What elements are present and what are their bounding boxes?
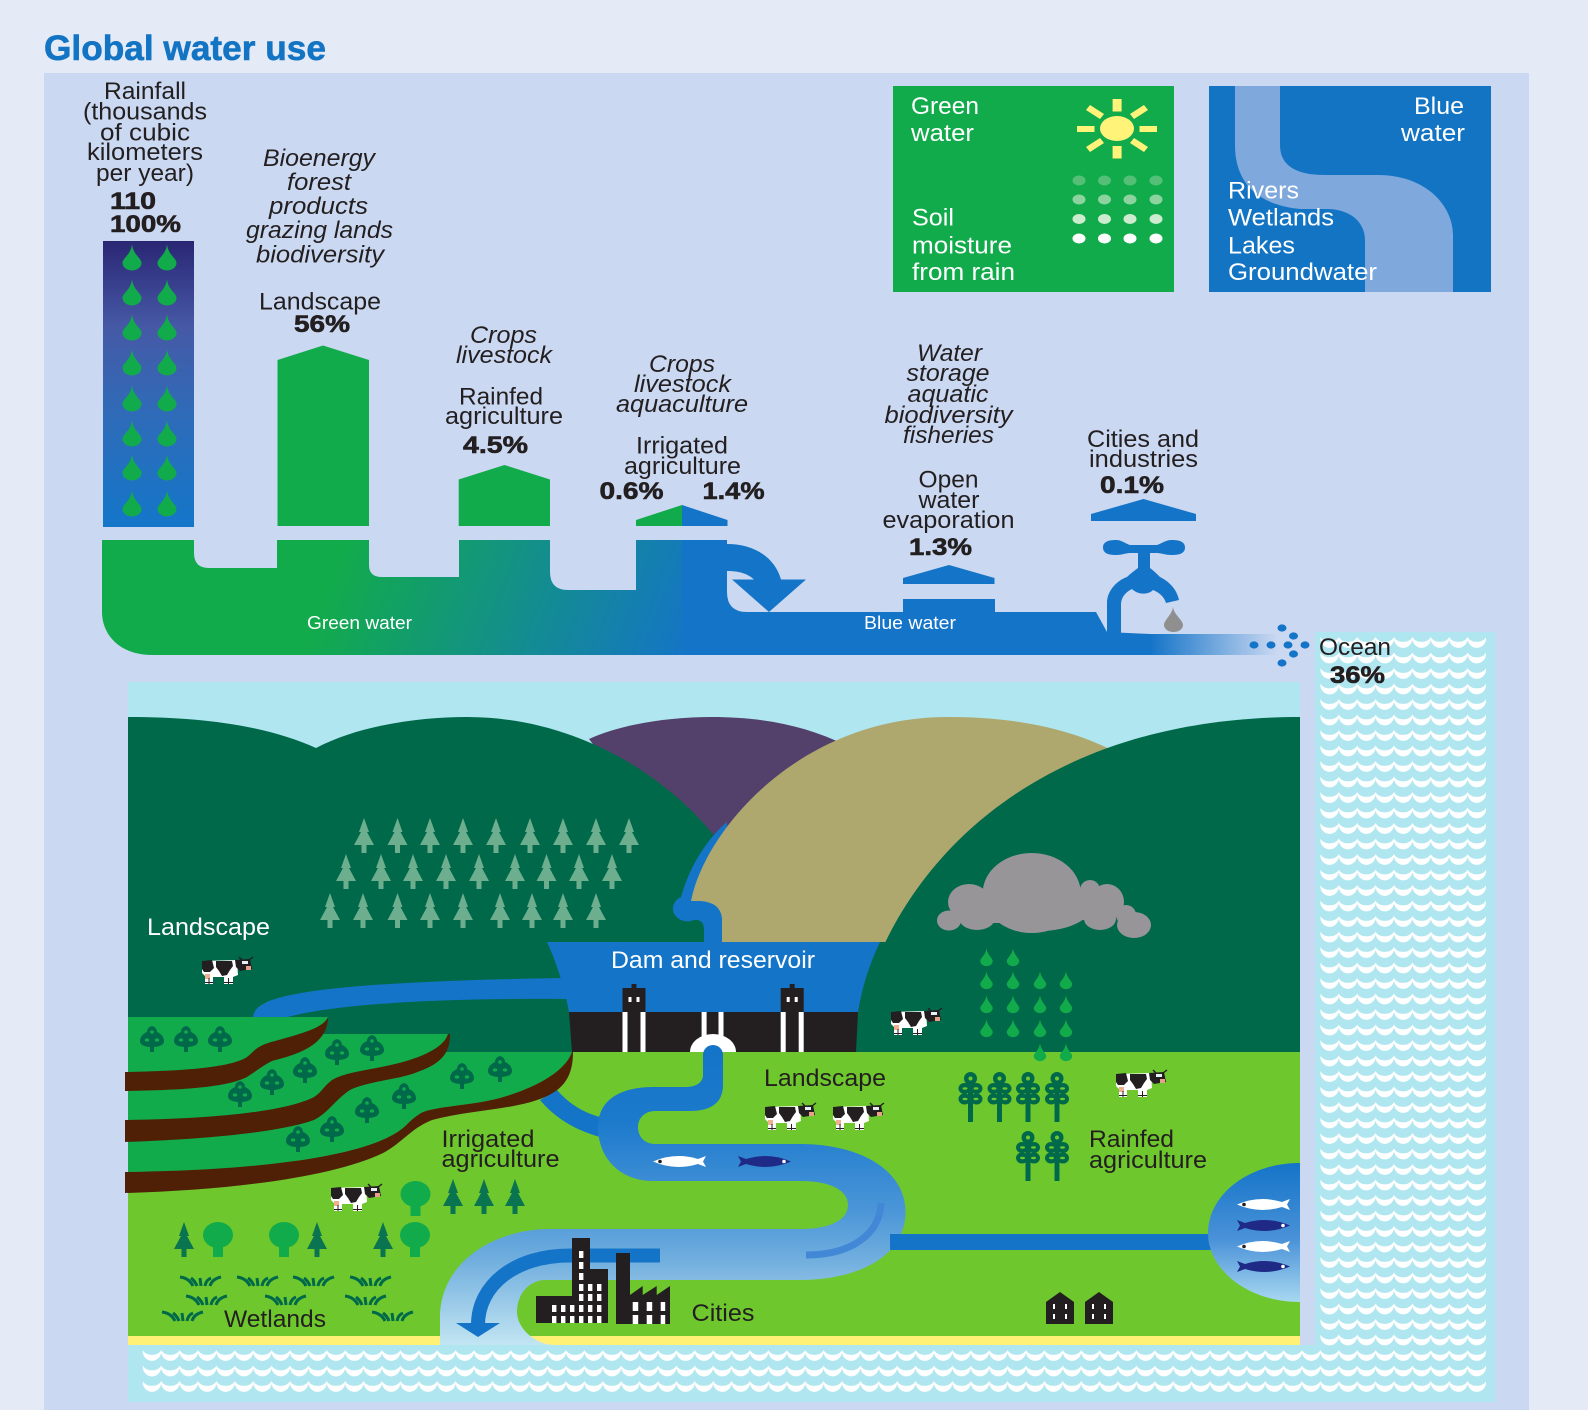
label: rainfed agriculture [445, 322, 563, 459]
terraces [125, 1017, 573, 1193]
label: open water evaporation: Water [917, 340, 983, 367]
title: Global water use [44, 29, 326, 68]
terrace trees [140, 1026, 512, 1152]
label: landscape uses: forest [287, 169, 352, 196]
label: open water evaporation [882, 340, 1014, 561]
label: landscape uses: grazing lands [246, 217, 393, 244]
label: landscape uses: Bioenergy [263, 145, 377, 172]
label: rainfall: 100% [110, 211, 181, 238]
mountain stream [673, 822, 730, 945]
label: cities: Cities [692, 1300, 754, 1327]
canal to terraces [253, 978, 568, 1017]
label: irrigated agriculture scene: Irrigated [442, 1126, 534, 1153]
purple distant hill [589, 717, 845, 900]
label: irrigated agriculture: agriculture [624, 453, 741, 480]
label: rainfall: Rainfall [104, 78, 186, 105]
panel: green water legend [893, 86, 1174, 292]
legend text: water bodies: Rivers [1228, 178, 1299, 204]
label: irrigated agriculture: Irrigated [636, 432, 728, 460]
flow: blue water [682, 540, 1277, 655]
label: irrigated agriculture: 0.6% [600, 478, 664, 505]
legend text: water bodies: Lakes [1228, 232, 1295, 260]
dam wall [569, 1012, 858, 1052]
label: open water evaporation: water [917, 487, 980, 514]
side channel [540, 1090, 600, 1137]
label: landscape uses: Landscape [259, 288, 381, 316]
label: cities and industries [1087, 426, 1199, 499]
label: rainfed agriculture scene: Rainfed [1089, 1126, 1174, 1153]
label: rainfed agriculture: 4.5% [463, 432, 528, 459]
label: landscape on hill: Landscape [147, 914, 270, 941]
arrow: river to sea [456, 1256, 660, 1337]
river fish [653, 1156, 791, 1167]
bar: rainfall with drops [103, 241, 194, 527]
label: green water: Green water [307, 613, 412, 633]
bar: rainfed agriculture [459, 465, 550, 526]
label: irrigated agriculture: Crops [649, 351, 715, 378]
small trees [174, 1179, 525, 1257]
label: irrigated agriculture scene [442, 1126, 560, 1173]
legend text: water bodies: Groundwater [1228, 259, 1377, 286]
label: rainfall: (thousands [83, 98, 207, 126]
label: cities and industries: Cities and [1087, 426, 1199, 453]
label: ocean [1319, 634, 1391, 689]
legend text: soil moisture: moisture [912, 232, 1012, 260]
reservoir [547, 942, 880, 1012]
label: open water evaporation: Open [918, 466, 978, 494]
landscape illustration [125, 682, 1300, 1345]
flow: green water [102, 540, 682, 655]
sky [128, 682, 1300, 1062]
label: landscape on plain: Landscape [764, 1065, 886, 1092]
rain drops [980, 948, 1072, 1061]
legend heading: green water [910, 93, 979, 147]
bar: landscape [278, 346, 369, 526]
icon: soil moisture dots [1072, 176, 1162, 244]
tan hill [691, 717, 1130, 945]
legend heading: blue water: water [1400, 120, 1465, 147]
ocean backing and wave pattern [128, 632, 1495, 1402]
ground [128, 1052, 1300, 1336]
icon: tap [1103, 540, 1185, 640]
label: cities and industries: industries [1089, 446, 1198, 473]
label: rainfall: of cubic [100, 120, 190, 146]
icon: river band [1235, 86, 1453, 292]
label: irrigated agriculture: 1.4% [702, 478, 764, 505]
icon: grey drip [1164, 607, 1183, 632]
label: ocean: 36% [1330, 662, 1385, 689]
dam tower right [781, 984, 804, 1012]
label: rainfed agriculture: livestock [456, 342, 554, 369]
label: rainfall: 110 [110, 188, 156, 215]
legend heading: green water: Green [911, 93, 979, 120]
legend heading: blue water: Blue [1414, 93, 1464, 120]
legend heading: green water: water [910, 120, 974, 147]
dark green hills [128, 717, 756, 1052]
label: rainfed agriculture: agriculture [445, 403, 563, 430]
label: ocean: Ocean [1319, 634, 1391, 661]
canal to lake [890, 1234, 1212, 1250]
label: open water evaporation: biodiversity [884, 402, 1014, 429]
panel: blue water legend [1209, 86, 1491, 292]
label: irrigated agriculture: livestock [634, 371, 733, 398]
legend text: water bodies [1228, 178, 1377, 286]
legend heading: blue water [1400, 93, 1465, 147]
icon: sun [1077, 99, 1157, 158]
label: irrigated agriculture: aquaculture [616, 391, 748, 418]
legend text: soil moisture: Soil [912, 204, 954, 232]
label: rainfall: kilometers [87, 139, 203, 166]
label: rainfed agriculture scene: agriculture [1089, 1147, 1207, 1174]
legend text: soil moisture [912, 204, 1015, 286]
hill backing behind dam [740, 942, 905, 1052]
legend text: soil moisture: from rain [912, 259, 1015, 286]
rain cloud [937, 853, 1151, 938]
label: rainfed agriculture: Rainfed [459, 384, 543, 410]
label: blue water: Blue water [864, 613, 956, 633]
bar: irrigated agriculture split green and blue [636, 505, 728, 526]
label: irrigated agriculture scene: agriculture [442, 1146, 560, 1173]
label: landscape uses: products [268, 193, 368, 220]
label: open water evaporation: fisheries [903, 422, 994, 449]
curved current mark [806, 1203, 881, 1255]
lake with fish [1208, 1163, 1300, 1302]
label: rainfed agriculture scene [1089, 1126, 1207, 1174]
label: rainfed agriculture: Crops [470, 322, 537, 349]
bar: cities and industries [1091, 499, 1196, 521]
label: open water evaporation: storage [906, 360, 990, 387]
label: irrigated agriculture [600, 351, 764, 505]
label: landscape uses: 56% [294, 311, 350, 338]
wetland tufts [162, 1277, 413, 1321]
forest of pines [320, 818, 639, 928]
label: landscape uses: biodiversity [256, 242, 386, 268]
label: wetlands: Wetlands [224, 1306, 326, 1333]
label: cities and industries: 0.1% [1100, 472, 1164, 499]
label: open water evaporation: aquatic [908, 381, 988, 408]
label: dam and reservoir: Dam and reservoir [611, 947, 815, 974]
factories [536, 1238, 670, 1324]
label: landscape uses [246, 145, 393, 338]
label: rainfall [83, 78, 207, 238]
arrow: irrigation return [727, 544, 806, 612]
label: rainfall: per year) [96, 160, 194, 187]
beach strip [128, 1336, 1300, 1345]
right dark green hill [855, 717, 1300, 1052]
bar: open water evaporation [903, 565, 994, 584]
wheat crops [958, 1072, 1069, 1181]
label: open water evaporation: evaporation [882, 507, 1014, 534]
dam tower left [622, 984, 646, 1012]
river [440, 1045, 906, 1345]
cows [202, 957, 1167, 1211]
label: open water evaporation: 1.3% [909, 534, 972, 561]
houses [1046, 1292, 1113, 1324]
icon: water dots spreading into ocean [1250, 624, 1310, 667]
legend text: water bodies: Wetlands [1228, 204, 1334, 232]
